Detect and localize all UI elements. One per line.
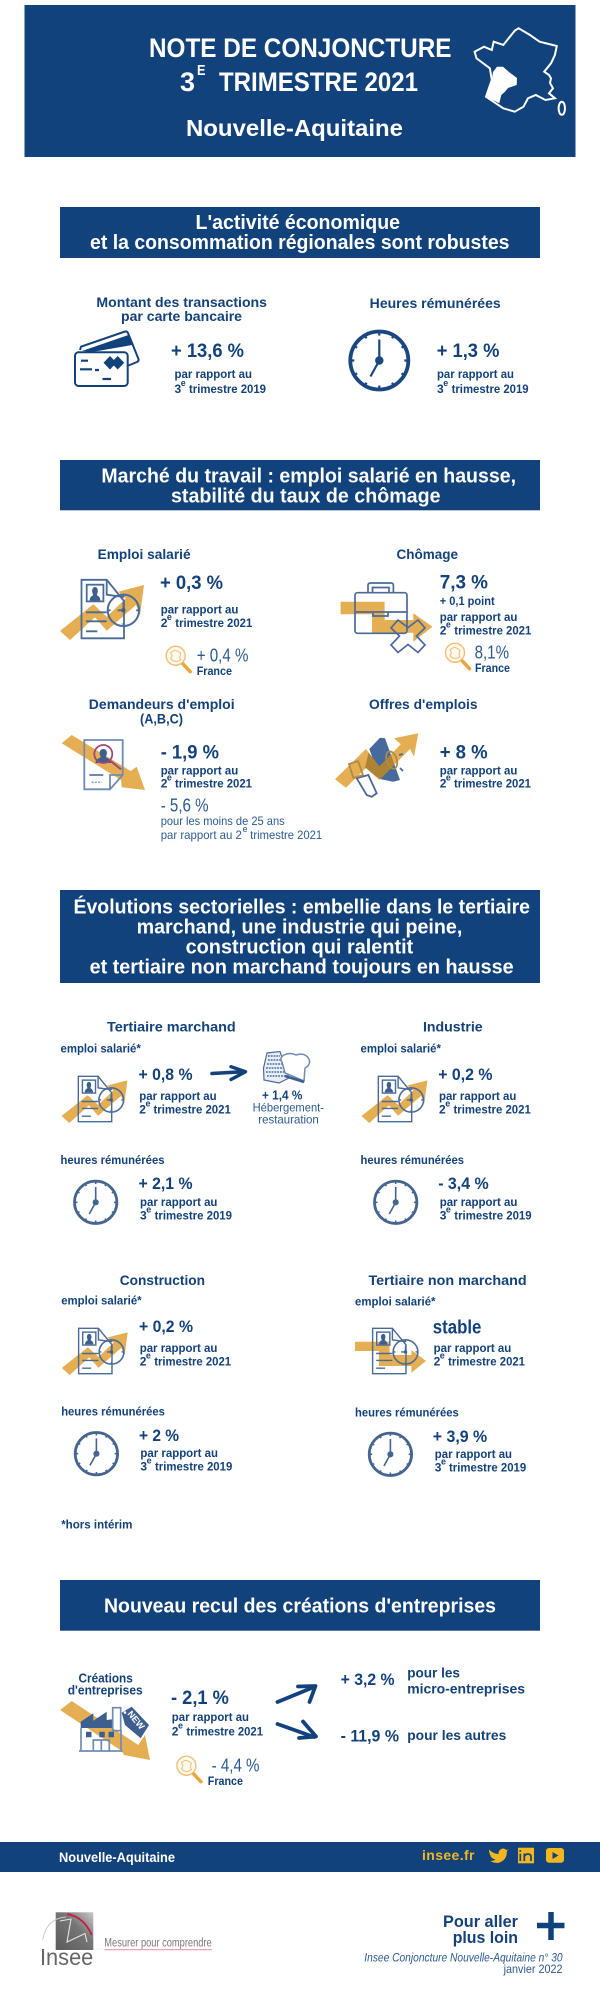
heading: transactions: Montant des transactions: [96, 294, 267, 310]
icon: clock: [375, 1181, 417, 1223]
comparison note: [434, 1341, 525, 1369]
comparison note: 2: [440, 777, 447, 791]
comparison note: trimestre 2019: [454, 1209, 532, 1223]
comparison note: 2: [139, 1103, 146, 1117]
icon: job document with flat arrow: [355, 1328, 426, 1374]
hospitality figure: + 1,4 %: [262, 1087, 303, 1102]
heading: demandeurs d'emploi: Demandeurs d'emploi: [89, 696, 235, 712]
stat: - 3,4 %: [438, 1175, 489, 1193]
sub-heading: heures: heures rémunérées: [61, 1405, 165, 1419]
comparison note: 3: [140, 1460, 147, 1474]
banner heading: [60, 1580, 540, 1631]
comparison note: trimestre 2021: [454, 1103, 531, 1117]
comparison note: e: [445, 1099, 450, 1109]
sub-heading: heures: heures rémunérées: [360, 1153, 464, 1167]
comparison note: trimestre 2021: [454, 624, 532, 638]
under-25 figure: e: [242, 824, 248, 834]
panel: tertiaire non marchand: [355, 1272, 527, 1475]
icon: job document with up arrow: [60, 580, 144, 640]
hospitality figure: restauration: [258, 1113, 319, 1127]
banner heading: et tertiaire non marchand toujours en hausse: [90, 956, 514, 978]
comparison note: [440, 763, 531, 791]
comparison note: par rapport au: [440, 763, 517, 777]
comparison note: trimestre 2019: [449, 1461, 527, 1475]
banner heading: [60, 890, 540, 983]
section: créations d'entreprises: [60, 1580, 540, 1788]
icon: clock: [75, 1181, 117, 1223]
further reading: [443, 1912, 564, 1947]
heading: Industrie: [423, 1019, 483, 1035]
arrow to hospitality: [212, 1067, 246, 1080]
icon: building and chef hat: [264, 1052, 310, 1083]
comparison note: par rapport au: [440, 610, 517, 624]
sub-heading: heures: heures rémunérées: [355, 1406, 459, 1420]
comparison note: par rapport au: [172, 1710, 249, 1724]
comparison note: par rapport au: [434, 1341, 511, 1355]
comparison note: par rapport au: [161, 763, 238, 777]
France comparison: France: [475, 661, 510, 675]
heading: Construction: [120, 1272, 205, 1288]
icon: job document: [361, 1076, 427, 1123]
banner heading: L'activité économique: [196, 212, 400, 234]
banner heading: Nouveau recul des créations d'entreprises: [104, 1595, 496, 1617]
footnote: *hors intérim: [61, 1518, 132, 1532]
header banner: [24, 5, 576, 157]
region label: Nouvelle-Aquitaine: [59, 1849, 175, 1865]
comparison note: par rapport au: [439, 1089, 516, 1103]
point change: + 0,1 point: [440, 594, 495, 608]
banner heading: [60, 460, 540, 510]
comparison note: 3: [440, 1209, 447, 1223]
label: micro-entreprises: [407, 1664, 525, 1696]
France comparison: [475, 642, 510, 675]
title line 2: E: [197, 62, 206, 79]
section: activité économique: [60, 207, 540, 396]
comparison note: trimestre 2021: [454, 777, 531, 791]
comparison note: trimestre 2021: [154, 1355, 231, 1369]
comparison note: 2: [439, 1103, 446, 1117]
comparison note: e: [443, 378, 448, 388]
under-25 figure: - 5,6 %: [161, 796, 209, 816]
France comparison: France: [208, 1774, 243, 1788]
comparison note: trimestre 2021: [175, 616, 253, 630]
hospitality figure: Hébergement-: [253, 1101, 324, 1115]
banner heading: marchand, une industrie qui peine,: [137, 916, 462, 938]
under-25 figure: trimestre 2021: [250, 828, 323, 842]
panel: tertiaire marchand: [60, 1019, 324, 1223]
publication reference: janvier 2022: [503, 1962, 563, 1976]
comparison note: trimestre 2021: [186, 1725, 263, 1739]
comparison note: e: [146, 1099, 151, 1109]
stat: micro-entreprises: + 3,2 %: [341, 1671, 395, 1689]
heading: Tertiaire marchand: [107, 1019, 236, 1035]
comparison note: par rapport au: [174, 367, 252, 381]
comparison note: trimestre 2019: [155, 1209, 232, 1223]
comparison note: par rapport au: [440, 1195, 517, 1209]
further reading: plus loin: [453, 1928, 518, 1947]
title line 2: 3: [180, 67, 195, 97]
under-25 figure: pour les moins de 25 ans: [161, 814, 285, 828]
stat: offres: + 8 %: [440, 742, 488, 763]
comparison note: 2: [161, 777, 168, 791]
stat: hours: + 1,3 %: [437, 341, 499, 362]
comparison note: [172, 1710, 263, 1739]
Insee logo: [40, 1912, 212, 1970]
comparison note: par rapport au: [435, 1447, 512, 1461]
publication reference: [364, 1951, 563, 1976]
comparison note: 3: [437, 382, 444, 396]
icon: job document: [62, 1328, 128, 1375]
France comparison: [208, 1755, 260, 1788]
comparison note: e: [181, 378, 186, 388]
banner heading: Marché du travail : emploi salarié en hausse,: [101, 465, 516, 487]
website: insee.fr: [422, 1847, 475, 1863]
comparison note: e: [146, 1205, 151, 1215]
heading: demandeurs d'emploi: (A,B,C): [140, 710, 183, 726]
comparison note: par rapport au: [140, 1341, 217, 1355]
icon: briefcase and cross: [341, 583, 432, 652]
banner heading: [60, 207, 540, 258]
sub-heading: heures: heures rémunérées: [60, 1153, 165, 1167]
comparison note: 3: [140, 1209, 147, 1223]
comparison note: trimestre 2019: [155, 1460, 233, 1474]
sub-heading: emploi: emploi salarié*: [360, 1042, 441, 1056]
heading: hours: Heures rémunérées: [370, 295, 501, 311]
region name: Nouvelle-Aquitaine: [186, 115, 403, 141]
heading: [68, 1671, 143, 1698]
footer band: [0, 1842, 600, 1872]
comparison note: 3: [435, 1461, 442, 1475]
comparison note: e: [441, 1457, 446, 1467]
France comparison: France: [197, 664, 232, 678]
comparison note: [140, 1195, 232, 1223]
heading: transactions: [96, 294, 267, 324]
publication reference: Insee Conjoncture Nouvelle-Aquitaine n° 30: [364, 1951, 563, 1965]
comparison note: [140, 1446, 233, 1474]
banner heading: Évolutions sectorielles : embellie dans le tertiaire: [74, 895, 530, 918]
section: marché du travail: [60, 460, 540, 842]
icon: bank cards: [75, 331, 139, 386]
comparison note: e: [446, 773, 451, 783]
further reading: Pour aller: [443, 1912, 518, 1931]
comparison note: [139, 1089, 231, 1117]
under-25 figure: par rapport au 2: [161, 828, 242, 842]
comparison note: e: [446, 620, 451, 630]
stat: + 3,9 %: [433, 1428, 488, 1446]
icon: clock: [75, 1433, 118, 1475]
comparison note: e: [167, 773, 172, 783]
title line 2: [180, 62, 418, 97]
icon: plus: [537, 1912, 564, 1940]
France comparison: 8,1%: [475, 642, 509, 662]
sub-heading: emploi: emploi salarié*: [355, 1295, 436, 1309]
comparison note: trimestre 2021: [154, 1103, 231, 1117]
label: micro-entreprises: micro-entreprises: [407, 1680, 525, 1696]
icon: clock: [350, 332, 408, 390]
hospitality figure: [253, 1087, 324, 1127]
comparison note: e: [147, 1456, 152, 1466]
comparison note: 2: [140, 1355, 147, 1369]
comparison note: [140, 1341, 231, 1369]
stat: emploi: + 0,3 %: [160, 573, 223, 594]
icon: megaphone with up arrow: [335, 733, 418, 797]
comparison note: 2: [434, 1355, 441, 1369]
comparison note: e: [178, 1721, 183, 1731]
stat: demandeurs: - 1,9 %: [161, 742, 219, 763]
stat: autres: - 11,9 %: [341, 1727, 399, 1745]
France comparison: [197, 646, 248, 678]
title line 1: NOTE DE CONJONCTURE: [149, 33, 452, 63]
comparison note: par rapport au: [140, 1195, 217, 1209]
sub-heading: emploi: emploi salarié*: [61, 1294, 142, 1308]
comparison note: par rapport au: [139, 1089, 217, 1103]
comparison note: trimestre 2019: [189, 382, 266, 396]
label: micro-entreprises: pour les: [407, 1664, 460, 1680]
icon: magnifier France: [446, 643, 470, 669]
icon: factory with down arrow and NEW tag: NEW: [125, 1709, 147, 1732]
comparison note: 2: [440, 624, 447, 638]
comparison note: [439, 1089, 531, 1117]
comparison note: e: [167, 612, 172, 622]
heading: Tertiaire non marchand: [368, 1272, 527, 1288]
icon: clock: [369, 1433, 412, 1475]
comparison note: e: [446, 1205, 451, 1215]
stat: + 0,2 %: [438, 1066, 493, 1084]
panel: construction: [61, 1272, 233, 1475]
arrow: down: [278, 1722, 316, 1738]
stat: + 2,1 %: [138, 1175, 193, 1193]
stat: + 2 %: [139, 1427, 179, 1445]
comparison note: trimestre 2021: [175, 777, 252, 791]
comparison note: [437, 367, 529, 396]
icon: magnifier France: [166, 646, 190, 672]
heading: offres: Offres d'emplois: [369, 696, 478, 712]
comparison note: 2: [161, 616, 168, 630]
stat: stable: [433, 1317, 481, 1338]
icon: linkedin: [518, 1848, 534, 1863]
sub-heading: emploi: emploi salarié*: [60, 1042, 141, 1056]
Insee logo: Insee: [40, 1944, 93, 1970]
icon: magnifier France: [177, 1756, 201, 1782]
icon: map of France: [475, 28, 565, 115]
comparison note: par rapport au: [437, 367, 514, 381]
icon: youtube: [546, 1848, 564, 1863]
comparison note: par rapport au: [161, 602, 238, 616]
Insee logo: Mesurer pour comprendre: [104, 1938, 212, 1950]
France comparison: - 4,4 %: [212, 1755, 260, 1775]
stat: - 2,1 %: [171, 1688, 229, 1709]
France comparison: + 0,4 %: [197, 646, 248, 666]
heading: emploi salarié: Emploi salarié: [98, 546, 191, 562]
section: évolutions sectorielles: [60, 890, 540, 1532]
comparison note: trimestre 2021: [448, 1355, 525, 1369]
comparison note: [161, 602, 253, 630]
comparison note: par rapport au: [140, 1446, 218, 1460]
comparison note: [435, 1447, 527, 1475]
arrow: up: [278, 1686, 316, 1702]
heading: Créations: [78, 1671, 133, 1686]
comparison note: 2: [172, 1725, 179, 1739]
comparison note: [174, 367, 266, 396]
comparison note: [440, 1195, 532, 1223]
banner heading: construction qui ralentit: [186, 936, 414, 958]
comparison note: e: [146, 1351, 151, 1361]
comparison note: trimestre 2019: [452, 382, 529, 396]
stat: + 0,8 %: [138, 1066, 193, 1084]
icon: factory with down arrow and NEW tag: [60, 1701, 150, 1760]
comparison note: e: [440, 1351, 445, 1361]
label: autres: pour les autres: [407, 1727, 507, 1743]
stat: + 0,2 %: [139, 1318, 193, 1336]
banner heading: stabilité du taux de chômage: [171, 485, 440, 507]
stat: transactions: + 13,6 %: [171, 341, 244, 362]
heading: chômage: Chômage: [396, 546, 458, 562]
comparison note: [161, 763, 252, 791]
banner heading: et la consommation régionales sont robustes: [90, 232, 510, 254]
title line 2: TRIMESTRE 2021: [219, 67, 418, 97]
comparison note: 3: [174, 382, 182, 396]
heading: demandeurs d'emploi: [89, 696, 235, 726]
comparison note: [440, 610, 532, 638]
icon: job seeker document with down arrow: [62, 735, 145, 790]
icon: twitter: [489, 1848, 508, 1863]
panel: industrie: [360, 1019, 532, 1223]
under-25 figure: [161, 796, 323, 842]
heading: transactions: par carte bancaire: [121, 308, 242, 324]
stat: chômage: 7,3 %: [440, 572, 488, 593]
icon: job document: [61, 1076, 127, 1123]
heading: d'entreprises: [68, 1683, 143, 1698]
